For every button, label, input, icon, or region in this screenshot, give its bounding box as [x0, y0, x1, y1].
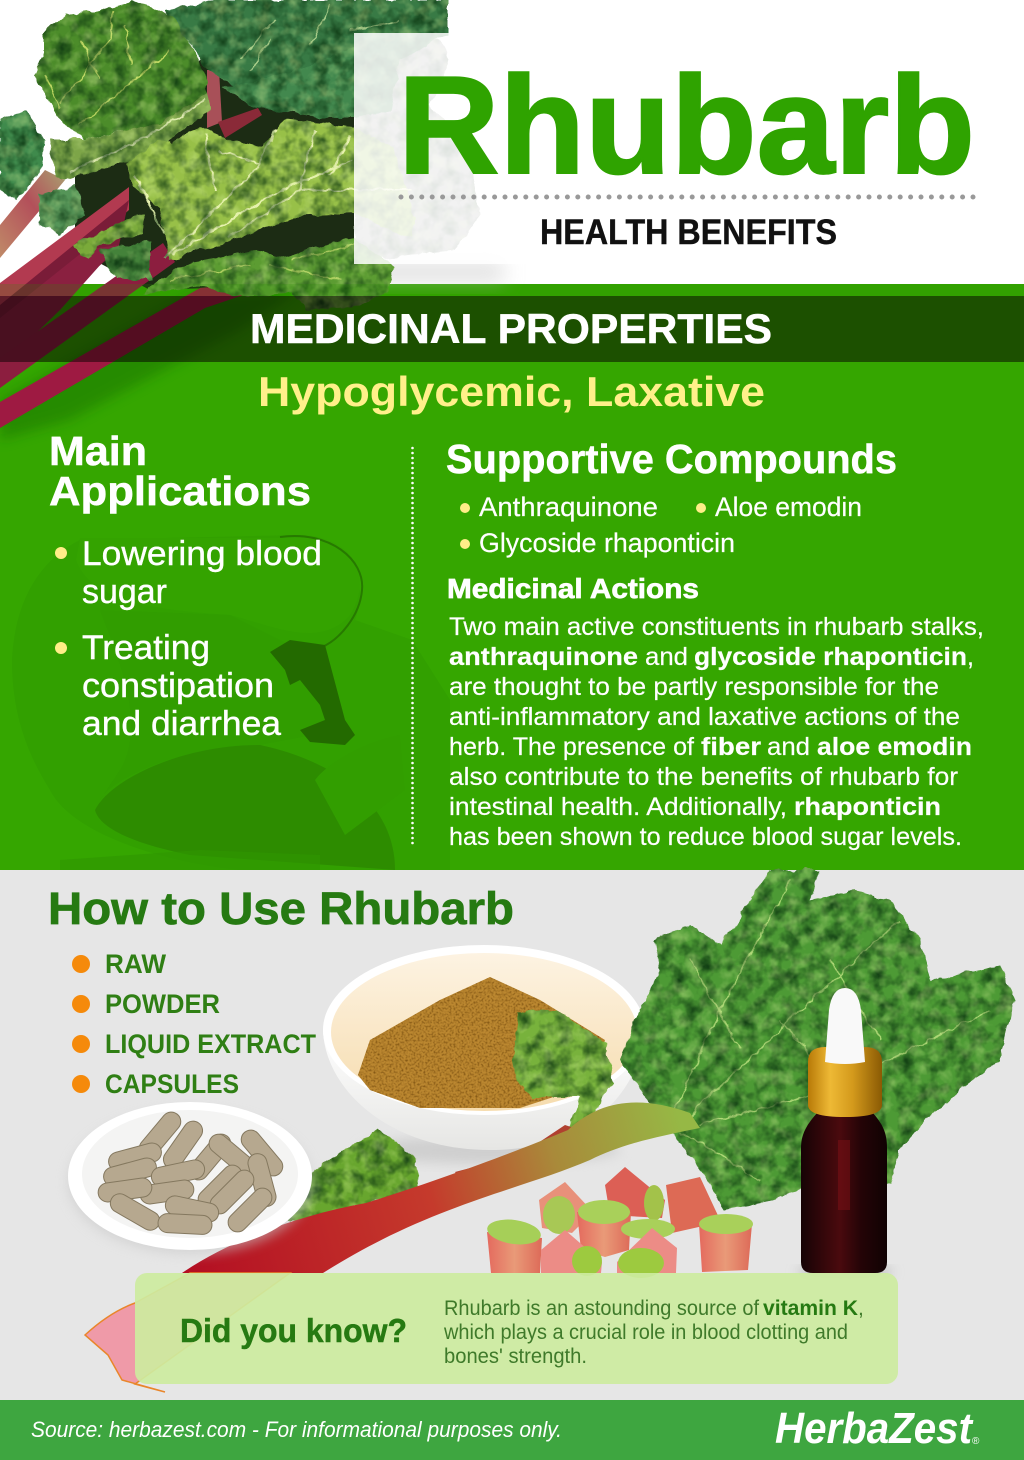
medicinal actions paragraph: rhaponticin — [794, 793, 941, 821]
heading — [49, 428, 311, 514]
registered mark: ® — [972, 1436, 980, 1447]
compound list: Glycoside rhaponticin — [479, 528, 735, 558]
bullet: treating constipation and diarrhea: and diarrhea — [82, 705, 281, 743]
gold collar — [808, 1047, 882, 1117]
leaf: central bright — [127, 120, 413, 260]
medicinal actions paragraph: herb. The presence of — [449, 733, 694, 761]
medicinal actions heading: Medicinal Actions — [447, 573, 699, 604]
small curled leaf over bowl — [513, 1010, 614, 1130]
dotted title divider — [401, 194, 973, 200]
subtitle: HEALTH BENEFITS — [540, 213, 837, 252]
leaf: lower left small — [38, 185, 85, 235]
capsules — [97, 1108, 287, 1236]
medicinal actions paragraph: Two main active constituents in rhubarb stalks, — [449, 613, 984, 641]
thin red stalk — [455, 1125, 580, 1180]
compound list — [460, 492, 862, 558]
callout text: , — [858, 1297, 864, 1320]
bullet: treating constipation and diarrhea: Treating — [82, 629, 210, 667]
leaf blade — [620, 870, 1015, 1210]
background photo: woman holding abdomen, green tint — [12, 535, 450, 870]
heading: Supportive Compounds — [446, 436, 897, 482]
heading: Applications — [49, 468, 311, 514]
illustration: rhubarb bunch — [0, 0, 504, 428]
soft shadow under the title panel — [354, 262, 504, 282]
medicinal actions paragraph: and — [767, 733, 810, 761]
medicinal actions paragraph: also contribute to the benefits of rhubarb for — [449, 763, 958, 791]
stalk tip — [85, 1273, 290, 1392]
medicinal actions paragraph: glycoside rhaponticin — [694, 643, 967, 671]
properties subheading: Hypoglycemic, Laxative — [258, 368, 765, 415]
heading: how to use rhubarb: How to Use Rhubarb — [48, 883, 514, 934]
leaf: bottom — [143, 237, 393, 310]
leaf: far left — [0, 110, 45, 200]
illustration: big rhubarb leaf with stalk — [85, 870, 1015, 1392]
illustration: chopped rhubarb pieces — [486, 1167, 753, 1278]
list of forms: CAPSULES — [105, 1069, 239, 1099]
medicinal actions paragraph: anti-inflammatory and laxative actions of the — [449, 703, 960, 731]
callout heading: Did you know? — [180, 1312, 407, 1349]
footer — [0, 1400, 1024, 1460]
illustration: bowl of rhubarb powder — [323, 945, 645, 1164]
compound list: Aloe emodin — [715, 492, 862, 522]
list of forms: LIQUID EXTRACT — [105, 1029, 316, 1059]
bullet: lowering blood sugar: Lowering blood — [82, 535, 322, 573]
illustration: bowl of capsules — [68, 1102, 312, 1254]
logo: HerbaZest — [775, 1404, 974, 1453]
leaf: top left — [35, 0, 207, 140]
panel: main applications — [49, 428, 322, 743]
leaf: top dark bluish — [165, 0, 448, 118]
bullet: lowering blood sugar: sugar — [82, 573, 167, 611]
medicinal actions paragraph: are thought to be partly responsible for the — [449, 673, 939, 701]
medicinal actions paragraph — [449, 613, 984, 851]
powder mound — [358, 977, 605, 1108]
small ruffled leaf — [277, 1128, 418, 1220]
dark shade behind the leaves — [75, 50, 354, 290]
compound list: Anthraquinone — [479, 492, 658, 522]
top white background — [0, 0, 1024, 284]
title: Rhubarb — [398, 48, 975, 203]
list of forms: POWDER — [105, 989, 220, 1019]
illustration: dropper bottle of extract — [797, 988, 893, 1277]
red stalks — [0, 70, 288, 428]
list of forms — [72, 949, 316, 1099]
heading: Main — [49, 428, 147, 474]
bullet: treating constipation and diarrhea — [55, 629, 281, 743]
callout text — [443, 1297, 864, 1368]
callout text: which plays a crucial role in blood clotting and — [443, 1321, 848, 1344]
bullet: lowering blood sugar — [55, 535, 322, 611]
white dropper — [825, 988, 865, 1064]
main stalk — [182, 1103, 700, 1273]
callout text: bones' strength. — [444, 1345, 587, 1368]
medicinal actions paragraph: , — [967, 643, 974, 671]
medicinal actions paragraph: intestinal health. Additionally, — [449, 793, 787, 821]
callout text: vitamin K — [763, 1297, 858, 1320]
callout: did you know — [135, 1273, 898, 1384]
bottle body — [801, 1112, 887, 1273]
source line: Source: herbazest.com - For informational purposes only. — [31, 1417, 562, 1442]
translucent white panel behind title — [354, 33, 984, 264]
medicinal actions paragraph: fiber — [701, 733, 761, 761]
leaf: underside with pale rib — [50, 93, 210, 178]
panel: how to use background — [0, 870, 1024, 1400]
panel: supportive compounds — [446, 436, 984, 851]
medicinal actions paragraph: aloe emodin — [817, 733, 972, 761]
leaf: small mid left — [72, 215, 145, 260]
band heading: MEDICINAL PROPERTIES — [250, 305, 772, 352]
pale ghost of leaves behind the title panel — [354, 40, 480, 262]
bullet: treating constipation and diarrhea: constipation — [82, 667, 274, 705]
stalk shadow on green — [0, 290, 300, 440]
medicinal actions paragraph: and — [645, 643, 688, 671]
dotted column divider — [411, 448, 414, 845]
medicinal actions paragraph: has been shown to reduce blood sugar levels. — [449, 823, 962, 851]
list of forms: RAW — [105, 949, 166, 979]
green medicinal section background — [0, 284, 1024, 870]
callout text: Rhubarb is an astounding source of — [444, 1297, 759, 1320]
band: medicinal properties — [0, 284, 1024, 362]
medicinal actions paragraph: anthraquinone — [449, 643, 638, 671]
